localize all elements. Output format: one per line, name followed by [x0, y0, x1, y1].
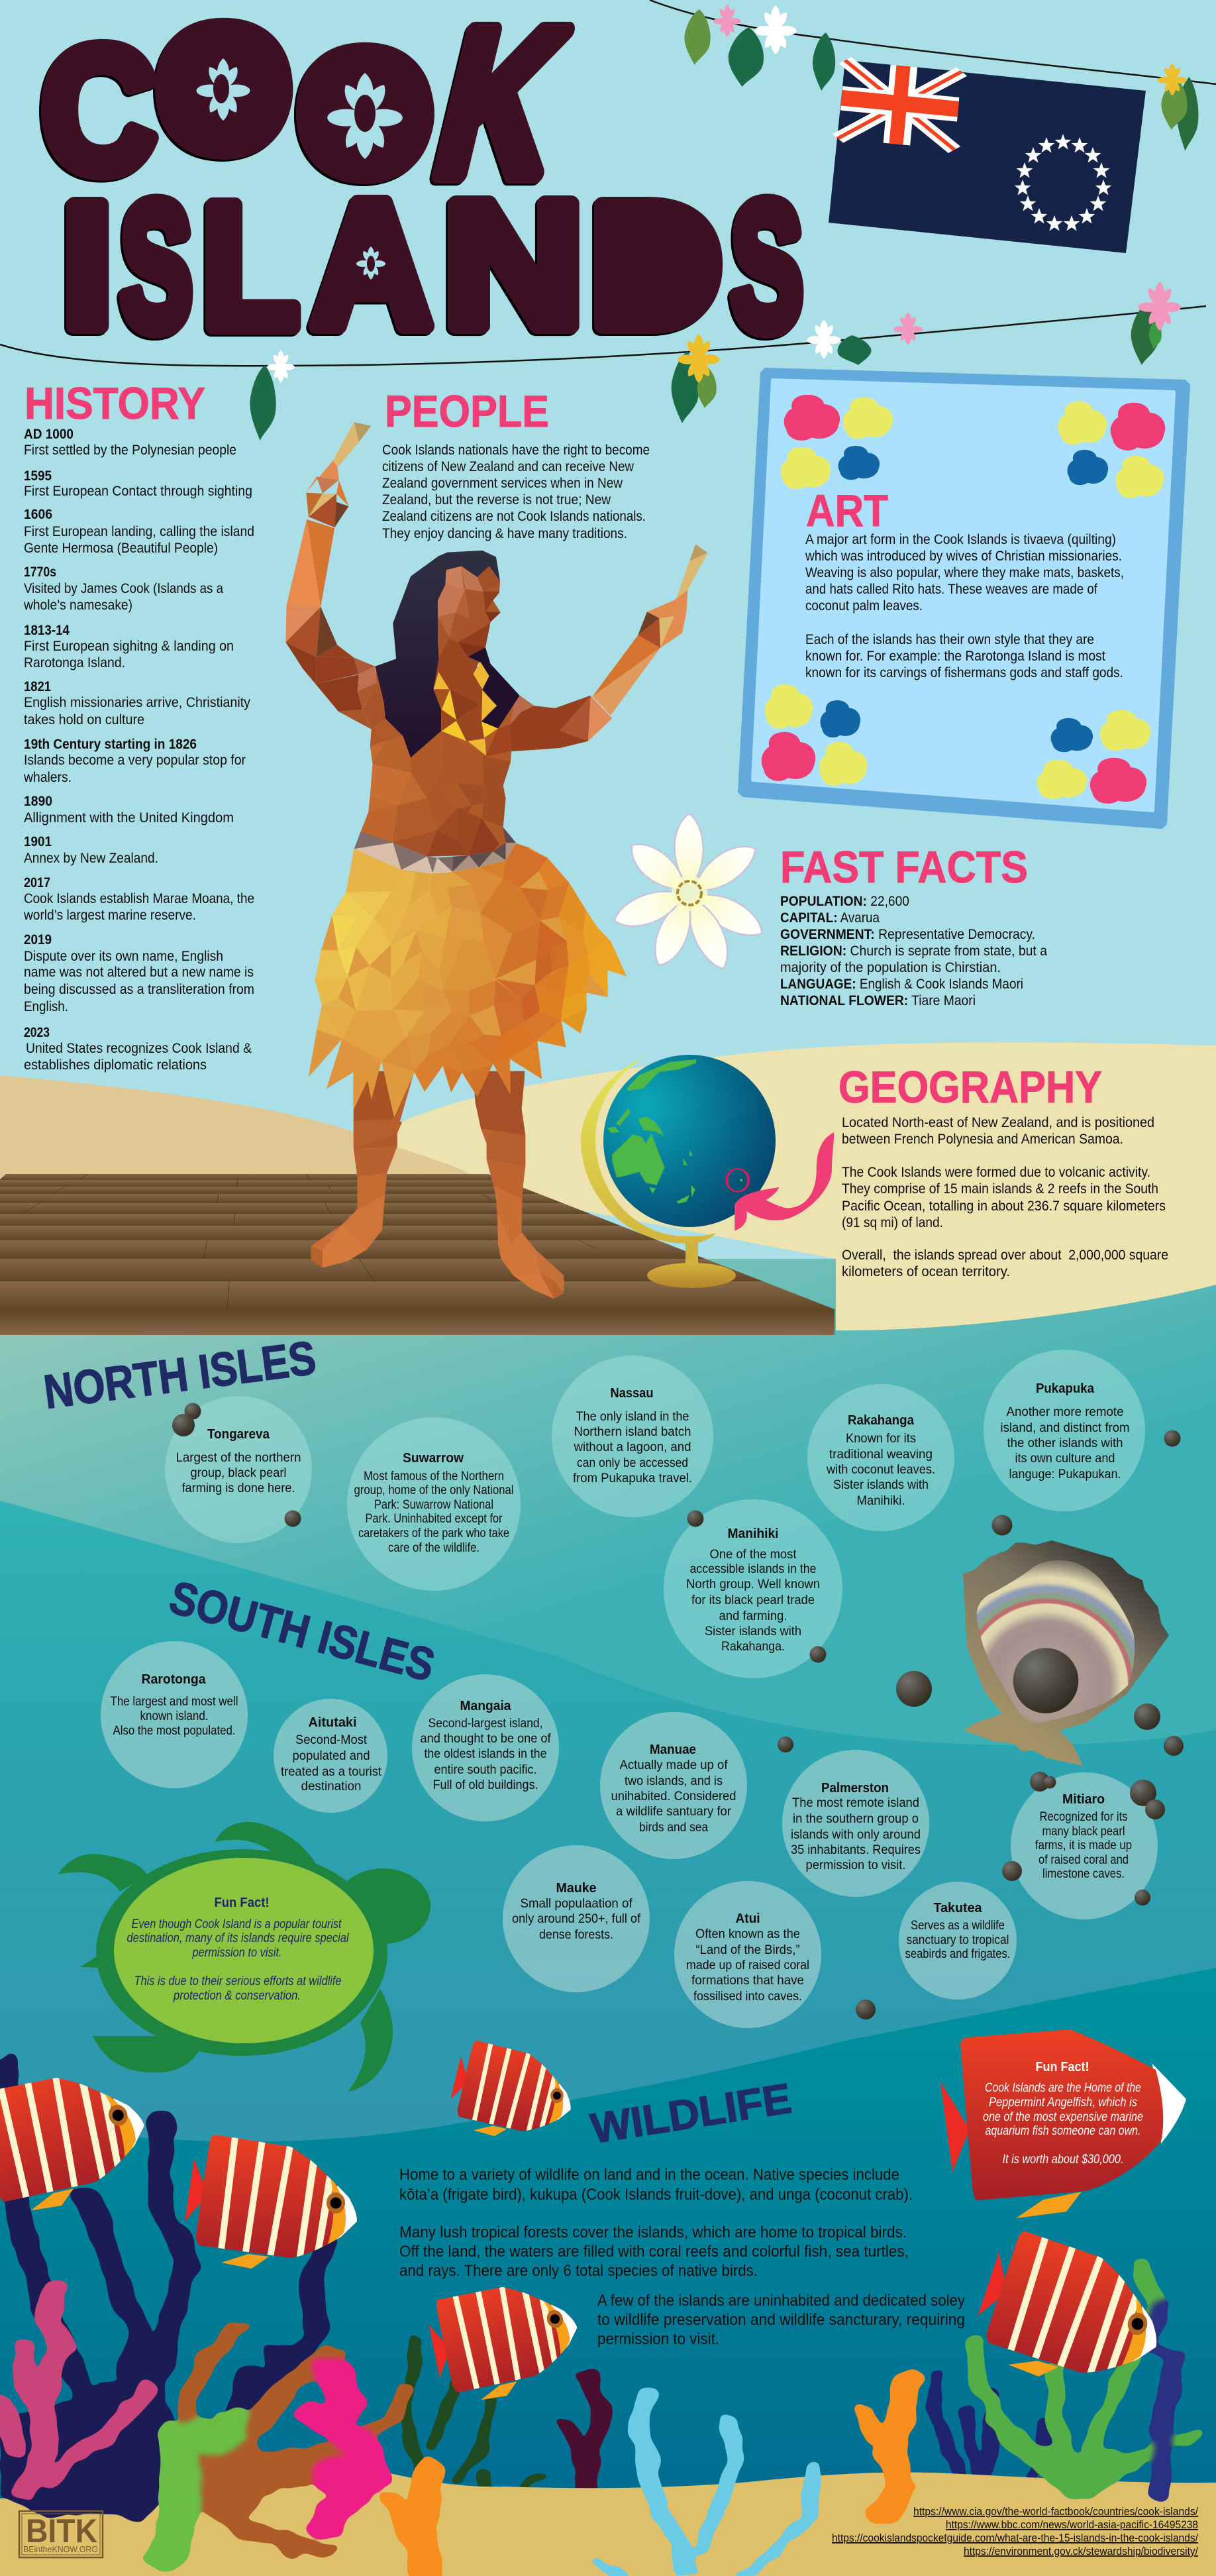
circle: Pukapuka — [984, 1350, 1145, 1511]
tan sand — [0, 1075, 470, 1179]
history timeline entries — [23, 427, 254, 1073]
dancer torso, arms, hair, necklace — [285, 519, 612, 873]
geography text: They comprise of 15 main islands & 2 reefs in the South — [842, 1181, 1158, 1197]
circle: Manuae: a wildlife santuary for — [616, 1805, 732, 1819]
title letters: S — [731, 164, 803, 367]
circle: Manihiki: Manihiki — [727, 1527, 779, 1541]
circle: Mangaia: entire south pacific. — [434, 1763, 536, 1777]
history timeline entries: 1770s — [24, 564, 56, 580]
history timeline entries: 1595 — [24, 468, 52, 484]
fun fact text: destination, many of its islands require special — [127, 1931, 349, 1945]
panel: north isles circles — [165, 1350, 1145, 1678]
navy coral — [0, 2061, 326, 2526]
art text: A major art form in the Cook Islands is tivaeva (quilting) — [805, 532, 1116, 547]
history timeline entries: First European Contact through sighting — [24, 484, 252, 499]
wildlife text — [399, 2166, 965, 2348]
garland leaves and flowers — [250, 4, 1198, 441]
fish white crescent — [1152, 2064, 1186, 2143]
heading: fast facts: FAST FACTS — [780, 842, 1028, 892]
history timeline entries: Gente Hermosa (Beautiful People) — [24, 541, 218, 556]
people text: Cook Islands nationals have the right to become — [382, 443, 650, 458]
circle: Suwarrow — [347, 1417, 521, 1591]
globe sphere — [603, 1055, 776, 1227]
circle: Atui — [674, 1881, 821, 2028]
heading: wildlife: WILDLIFE — [587, 2074, 794, 2153]
fish: upper left — [0, 2037, 169, 2229]
circle: Mangaia: Full of old buildings. — [433, 1778, 538, 1792]
circle: Manihiki: North group. Well known — [686, 1578, 820, 1591]
fish: top centre — [448, 2037, 583, 2143]
fun fact text: Peppermint Angelfish, which is — [989, 2096, 1137, 2110]
circle: Manihiki: and farming. — [719, 1609, 787, 1623]
circle: Atui: “Land of the Birds,” — [695, 1943, 800, 1957]
title letters — [42, 0, 803, 367]
circle: Aitutaki — [274, 1699, 387, 1813]
history timeline entries: English missionaries arrive, Christianity — [24, 695, 250, 710]
fun fact text: one of the most expensive marine — [983, 2110, 1143, 2124]
fun fact text — [983, 2081, 1143, 2167]
history timeline entries: Dispute over its own name, English — [24, 949, 223, 964]
circle: Mitiaro: limestone caves. — [1042, 1867, 1125, 1881]
art text: Each of the islands has their own style that they are — [805, 632, 1094, 647]
history timeline entries: Rarotonga Island. — [24, 655, 125, 671]
people text: citizens of New Zealand and can receive New — [382, 459, 634, 474]
black pearls — [172, 1403, 1184, 2019]
title letters: C — [42, 10, 156, 209]
wildlife text: permission to visit. — [597, 2330, 719, 2348]
art text: which was introduced by wives of Christian missionaries. — [805, 549, 1122, 564]
dancer hands and right forearm — [306, 422, 708, 716]
history timeline entries: Cook Islands establish Marae Moana, the — [24, 891, 254, 906]
circle: Manihiki: Sister islands with — [705, 1625, 801, 1638]
circle: Rakahanga: Sister islands with — [833, 1478, 929, 1492]
circle: Rakahanga: Known for its — [846, 1432, 916, 1446]
circle: Pukapuka: island, and distinct from — [1000, 1421, 1130, 1435]
ring of fifteen stars — [1015, 134, 1111, 231]
circle: Palmerston: The most remote island — [792, 1796, 919, 1810]
circle: Manihiki — [664, 1499, 842, 1678]
circle: Palmerston: Palmerston — [821, 1781, 889, 1796]
globe stand base — [647, 1241, 736, 1288]
title letters: N — [444, 164, 583, 364]
circle: Manihiki: for its black pearl trade — [691, 1593, 815, 1607]
history timeline entries: First European sighitng & landing on — [24, 639, 234, 654]
heading: geography: GEOGRAPHY — [838, 1062, 1102, 1112]
fun fact text: It is worth about $30,000. — [1003, 2153, 1123, 2167]
people text: Zealand citizens are not Cook Islands nationals. — [382, 509, 646, 524]
history timeline entries: United States recognizes Cook Island & — [26, 1041, 252, 1056]
history timeline entries: Visited by James Cook (Islands as a — [24, 581, 223, 596]
title: Cook Islands — [42, 0, 803, 367]
history timeline entries: 1890 — [24, 794, 52, 809]
circle: Pukapuka: its own culture and — [1015, 1452, 1115, 1466]
history timeline entries: name was not altered but a new name is — [24, 965, 254, 980]
circle: Tongareva: farming is done here. — [181, 1481, 295, 1495]
circle: Atui: Atui — [735, 1911, 760, 1926]
fast facts list: POPULATION: 22,600 — [780, 894, 909, 909]
heading: north isles: NORTH ISLES — [41, 1331, 319, 1419]
circle: Mauke: Mauke — [556, 1881, 596, 1896]
wildlife text: Off the land, the waters are filled with coral reefs and colorful fish, sea turtles, — [399, 2243, 909, 2261]
circle: Atui: Often known as the — [695, 1927, 800, 1941]
circle: Rarotonga: The largest and most well — [110, 1695, 238, 1709]
history timeline entries: establishes diplomatic relations — [24, 1057, 207, 1073]
BITK logo: BITK — [26, 2512, 97, 2549]
circle: Aitutaki: destination — [301, 1780, 362, 1794]
fun fact title: Fun Fact! — [215, 1896, 269, 1910]
circle: Takutea — [899, 1882, 1017, 2000]
circle: Palmerston: in the southern group o — [793, 1812, 919, 1826]
geography text: kilometers of ocean territory. — [842, 1263, 1010, 1279]
quilting pattern blobs — [762, 395, 1165, 804]
circle: Pukapuka: Pukapuka — [1036, 1381, 1095, 1396]
globe continents — [607, 1059, 748, 1204]
front corals — [0, 2263, 1194, 2573]
circle: Manuae — [600, 1712, 747, 1859]
circle: Pukapuka: Another more remote — [1007, 1405, 1123, 1419]
title letters: S — [121, 164, 193, 367]
circle: Aitutaki: Aitutaki — [309, 1715, 356, 1730]
wildlife text: Home to a variety of wildlife on land and in the ocean. Native species include — [399, 2166, 899, 2184]
fast facts list: LANGUAGE: English & Cook Islands Maori — [780, 977, 1023, 992]
circle: Nassau: can only be accessed — [577, 1456, 688, 1470]
source links: https://environment.gov.ck/stewardship/biodiversity/ — [964, 2545, 1198, 2557]
source links — [832, 2505, 1198, 2557]
history timeline entries: English. — [24, 999, 68, 1014]
history timeline entries: 1821 — [24, 679, 51, 694]
source links: https://www.bbc.com/news/world-asia-pacific-16495238 — [946, 2518, 1198, 2531]
heading: art: ART — [806, 486, 888, 536]
art text: and hats called Rito hats. These weaves are made of — [805, 582, 1097, 597]
circle: Rarotonga: Also the most populated. — [113, 1724, 236, 1738]
circle: Atui: made up of raised coral — [686, 1959, 809, 1972]
people text: They enjoy dancing & have many traditions. — [382, 526, 627, 541]
circle: Pukapuka: the other islands with — [1007, 1436, 1123, 1450]
people text: Zealand government services when in New — [382, 476, 623, 491]
history timeline entries: 1606 — [24, 507, 52, 522]
circle: Suwarrow: caretakers of the park who take — [358, 1527, 509, 1540]
art canvas — [753, 380, 1174, 810]
circle: Takutea: Serves as a wildlife — [911, 1919, 1005, 1933]
history timeline entries: 2017 — [24, 875, 50, 890]
heading: history: HISTORY — [25, 378, 205, 429]
people text: Zealand, but the reverse is not true; New — [382, 492, 611, 508]
circle: Nassau: Northern island batch — [574, 1425, 691, 1439]
wooden dock — [0, 1174, 861, 1335]
circle: Mauke: Small populaation of — [521, 1897, 633, 1911]
geography text: Overall, the islands spread over about 2,000,000 square — [842, 1247, 1168, 1263]
flower in A — [356, 246, 385, 280]
dancer grass skirt — [309, 843, 627, 1118]
panel: history — [23, 378, 254, 1073]
geography text: Located North-east of New Zealand, and is positioned — [842, 1114, 1154, 1130]
history timeline entries: world’s largest marine reserve. — [23, 908, 196, 923]
title letters: I — [62, 167, 113, 364]
history timeline entries: 1813-14 — [24, 623, 70, 638]
art text: known for. For example: the Rarotonga Island is most — [805, 649, 1105, 664]
globe — [581, 1055, 834, 1288]
geography text: (91 sq mi) of land. — [842, 1214, 943, 1230]
history timeline entries: whalers. — [23, 770, 72, 785]
people text — [382, 443, 650, 541]
circle: Rakahanga: Manihiki. — [857, 1494, 905, 1508]
flower in second O — [327, 73, 403, 159]
fish: lower right — [970, 2222, 1182, 2397]
panel: fast facts — [780, 842, 1047, 1008]
panel: wildlife — [399, 2074, 965, 2348]
history timeline entries: takes hold on culture — [24, 712, 144, 727]
Cook Islands flag — [829, 60, 1146, 253]
circle: Nassau — [552, 1356, 713, 1517]
cream sand — [391, 1042, 1216, 1330]
turtle shell — [114, 1858, 374, 2043]
panel: art — [739, 369, 1189, 828]
wildlife text: Many lush tropical forests cover the islands, which are home to tropical birds. — [399, 2224, 907, 2241]
circle: Rakahanga: traditional weaving — [829, 1448, 933, 1462]
circle: Mitiaro: of raised coral and — [1039, 1853, 1129, 1867]
circle: Suwarrow: group, home of the only National — [354, 1483, 514, 1497]
panel: fun fact fish — [940, 2029, 1186, 2218]
circle: Mangaia — [412, 1674, 559, 1821]
history timeline entries: 2019 — [24, 932, 52, 947]
wildlife text: to wildlife preservation and wildlife sancturary, requiring — [597, 2311, 965, 2329]
circle: Suwarrow: care of the wildlife. — [388, 1541, 480, 1555]
wildlife text: A few of the islands are uninhabited and dedicated soley — [597, 2292, 965, 2310]
wildlife text: kōta’a (frigate bird), kukupa (Cook Islands fruit-dove), and unga (coconut crab). — [399, 2186, 913, 2204]
fun fact text: aquarium fish someone can own. — [986, 2124, 1140, 2138]
circle: Mangaia: and thought to be one of — [420, 1732, 551, 1746]
title letters: D — [590, 168, 722, 364]
history timeline entries: being discussed as a transliteration from — [24, 982, 254, 997]
circle: Manuae: Actually made up of — [620, 1758, 728, 1772]
circle: Aitutaki: Second-Most — [295, 1733, 368, 1747]
circle: Tongareva — [165, 1396, 312, 1543]
circle: Mitiaro: farms, it is made up — [1035, 1839, 1132, 1852]
circle: Nassau: without a lagoon, and — [574, 1440, 691, 1454]
circle: Tongareva: Tongareva — [207, 1427, 270, 1442]
circle: Suwarrow: Most famous of the Northern — [364, 1470, 504, 1483]
circle: Nassau: from Pukapuka travel. — [573, 1472, 692, 1485]
title letters: L — [202, 167, 299, 364]
circle: Mangaia: Mangaia — [460, 1699, 511, 1713]
circle: Nassau: The only island in the — [576, 1410, 689, 1424]
circle: Mitiaro: Mitiaro — [1062, 1792, 1105, 1807]
circle: Aitutaki: populated and — [293, 1749, 370, 1763]
circle: Takutea: sanctuary to tropical — [906, 1933, 1009, 1947]
circle: Takutea: Takutea — [934, 1901, 982, 1915]
icon: oyster shell with black pearl — [963, 1540, 1169, 1766]
background: deep water — [0, 1968, 1216, 2576]
history timeline entries: 19th Century starting in 1826 — [24, 737, 197, 752]
art text — [805, 532, 1124, 680]
fast facts list: CAPITAL: Avarua — [780, 910, 880, 926]
background: shallow water — [0, 1259, 1216, 2576]
circle: Manuae: birds and sea — [639, 1821, 708, 1835]
circle: Takutea: seabirds and frigates. — [905, 1947, 1011, 1961]
history timeline entries: Allignment with the United Kingdom — [24, 810, 234, 826]
history timeline entries: Annex by New Zealand. — [24, 851, 158, 866]
panel: south isles circles — [101, 1641, 1158, 2028]
circle: Mitiaro: Recognized for its — [1040, 1810, 1127, 1824]
geography text: The Cook Islands were formed due to volcanic activity. — [842, 1164, 1150, 1180]
icon: tiare flower — [609, 814, 769, 975]
fast facts list: GOVERNMENT: Representative Democracy. — [780, 927, 1035, 942]
circle: Atui: fossilised into caves. — [693, 1990, 802, 2004]
garland strings — [0, 0, 1216, 366]
fun fact text: permission to visit. — [192, 1946, 282, 1960]
circle: Manihiki: One of the most — [710, 1548, 797, 1562]
history timeline entries: whole’s namesake) — [23, 598, 132, 613]
circle: Palmerston: 35 inhabitants. Requires — [791, 1843, 921, 1857]
circle: Rarotonga: Rarotonga — [142, 1672, 206, 1687]
fish: centre left — [185, 2131, 366, 2269]
fun fact text: Even though Cook Island is a popular tourist — [131, 1917, 342, 1931]
panel: people — [382, 386, 650, 541]
circle: Suwarrow: Suwarrow — [403, 1451, 464, 1466]
art frame — [739, 369, 1189, 828]
sea floor sand — [0, 2468, 1216, 2576]
art text: coconut palm leaves. — [805, 598, 923, 614]
heading: south isles: SOUTH ISLES — [164, 1571, 440, 1691]
circle: Mangaia: the oldest islands in the — [424, 1747, 547, 1761]
circle: Mitiaro — [1011, 1772, 1158, 1919]
circle: Mauke: only around 250+, full of — [512, 1912, 641, 1926]
fun fact text: protection & conservation. — [173, 1989, 301, 2003]
circle: Aitutaki: treated as a tourist — [281, 1765, 382, 1779]
circle: Rarotonga: known island. — [140, 1709, 208, 1723]
circle: Suwarrow: Park: Suwarrow National — [374, 1498, 493, 1512]
circle: Tongareva: Largest of the northern — [176, 1451, 301, 1465]
fast facts list: majority of the population is Chirstian. — [780, 960, 1001, 975]
back corals behind the sand — [407, 2337, 1047, 2495]
circle: Rakahanga: with coconut leaves. — [826, 1463, 935, 1477]
flag field — [829, 60, 1146, 253]
wildlife text: and rays. There are only 6 total species of native birds. — [399, 2262, 758, 2280]
background: mid water wedge — [0, 1501, 1216, 2576]
fish red body — [960, 2029, 1163, 2200]
circle: Manihiki: accessible islands in the — [690, 1562, 816, 1576]
geography text — [842, 1114, 1168, 1279]
circle: Palmerston: islands with only around — [791, 1828, 921, 1842]
circle: Mauke — [503, 1845, 650, 1992]
circle: Manihiki: Rakahanga. — [721, 1640, 785, 1654]
fun fact title: Fun Fact! — [1036, 2060, 1089, 2074]
arrow pointing at Cook Islands — [735, 1132, 834, 1231]
title letters: O — [297, 15, 433, 212]
turtle flippers and head — [58, 1822, 431, 2092]
BITK logo: BEintheKNOW.ORG — [23, 2544, 98, 2554]
circle: Manuae: unihabited. Considered — [611, 1790, 736, 1803]
art text: known for its carvings of fishermans gods and staff gods. — [805, 665, 1123, 680]
fun fact text: Cook Islands are the Home of the — [985, 2081, 1141, 2095]
history timeline entries: Islands become a very popular stop for — [24, 753, 246, 768]
globe ring — [581, 1056, 716, 1244]
dancer legs — [311, 1071, 564, 1299]
circle: Tongareva: group, black pearl — [191, 1466, 286, 1480]
history timeline entries: 1901 — [24, 834, 52, 849]
circle: Manuae: two islands, and is — [625, 1774, 723, 1788]
geography text: between French Polynesia and American Samoa. — [842, 1131, 1123, 1147]
circle: Palmerston: permission to visit. — [805, 1858, 906, 1872]
flower in first O — [197, 58, 250, 121]
history timeline entries: First settled by the Polynesian people — [24, 443, 236, 458]
source links: https://www.cia.gov/the-world-factbook/countries/cook-islands/ — [913, 2505, 1198, 2518]
union jack — [838, 60, 962, 150]
heading: people: PEOPLE — [385, 386, 549, 437]
circle: Nassau: Nassau — [611, 1386, 653, 1401]
circle: Pukapuka: languge: Pukapukan. — [1009, 1468, 1121, 1481]
circle: Atui: formations that have — [691, 1974, 804, 1988]
circle: Palmerston — [782, 1750, 929, 1897]
geography text: Pacific Ocean, totalling in about 236.7 square kilometers — [842, 1198, 1166, 1214]
circle: Rakahanga: Rakahanga — [848, 1413, 915, 1428]
fast facts list: NATIONAL FLOWER: Tiare Maori — [780, 993, 976, 1008]
circle: Suwarrow: Park. Uninhabited except for — [366, 1512, 503, 1526]
panel: turtle fun fact — [58, 1822, 431, 2092]
fast facts list: RELIGION: Church is seprate from state, but a — [780, 943, 1047, 959]
art text: Weaving is also popular, where they make mats, baskets, — [805, 565, 1124, 580]
history timeline entries: 2023 — [24, 1025, 50, 1040]
fish: lower centre — [413, 2253, 598, 2415]
title letters: A — [311, 164, 432, 364]
circle: Rakahanga — [807, 1384, 954, 1531]
circle: Mangaia: Second-largest island, — [428, 1717, 543, 1731]
fun fact text — [127, 1917, 349, 2003]
history timeline entries: First European landing, calling the island — [24, 524, 254, 539]
circle: Manuae: Manuae — [650, 1743, 696, 1757]
fish tail and fin — [940, 2082, 1082, 2218]
circle: Mauke: dense forests. — [539, 1928, 613, 1942]
history timeline entries: AD 1000 — [24, 427, 74, 442]
circle: Rarotonga — [101, 1641, 248, 1788]
panel: geography — [838, 1062, 1168, 1279]
fast facts list — [780, 894, 1047, 1008]
dancer figure — [285, 422, 708, 1299]
fun fact text: This is due to their serious efforts at wildlife — [134, 1974, 342, 1988]
circle: Mitiaro: many black pearl — [1042, 1825, 1125, 1839]
